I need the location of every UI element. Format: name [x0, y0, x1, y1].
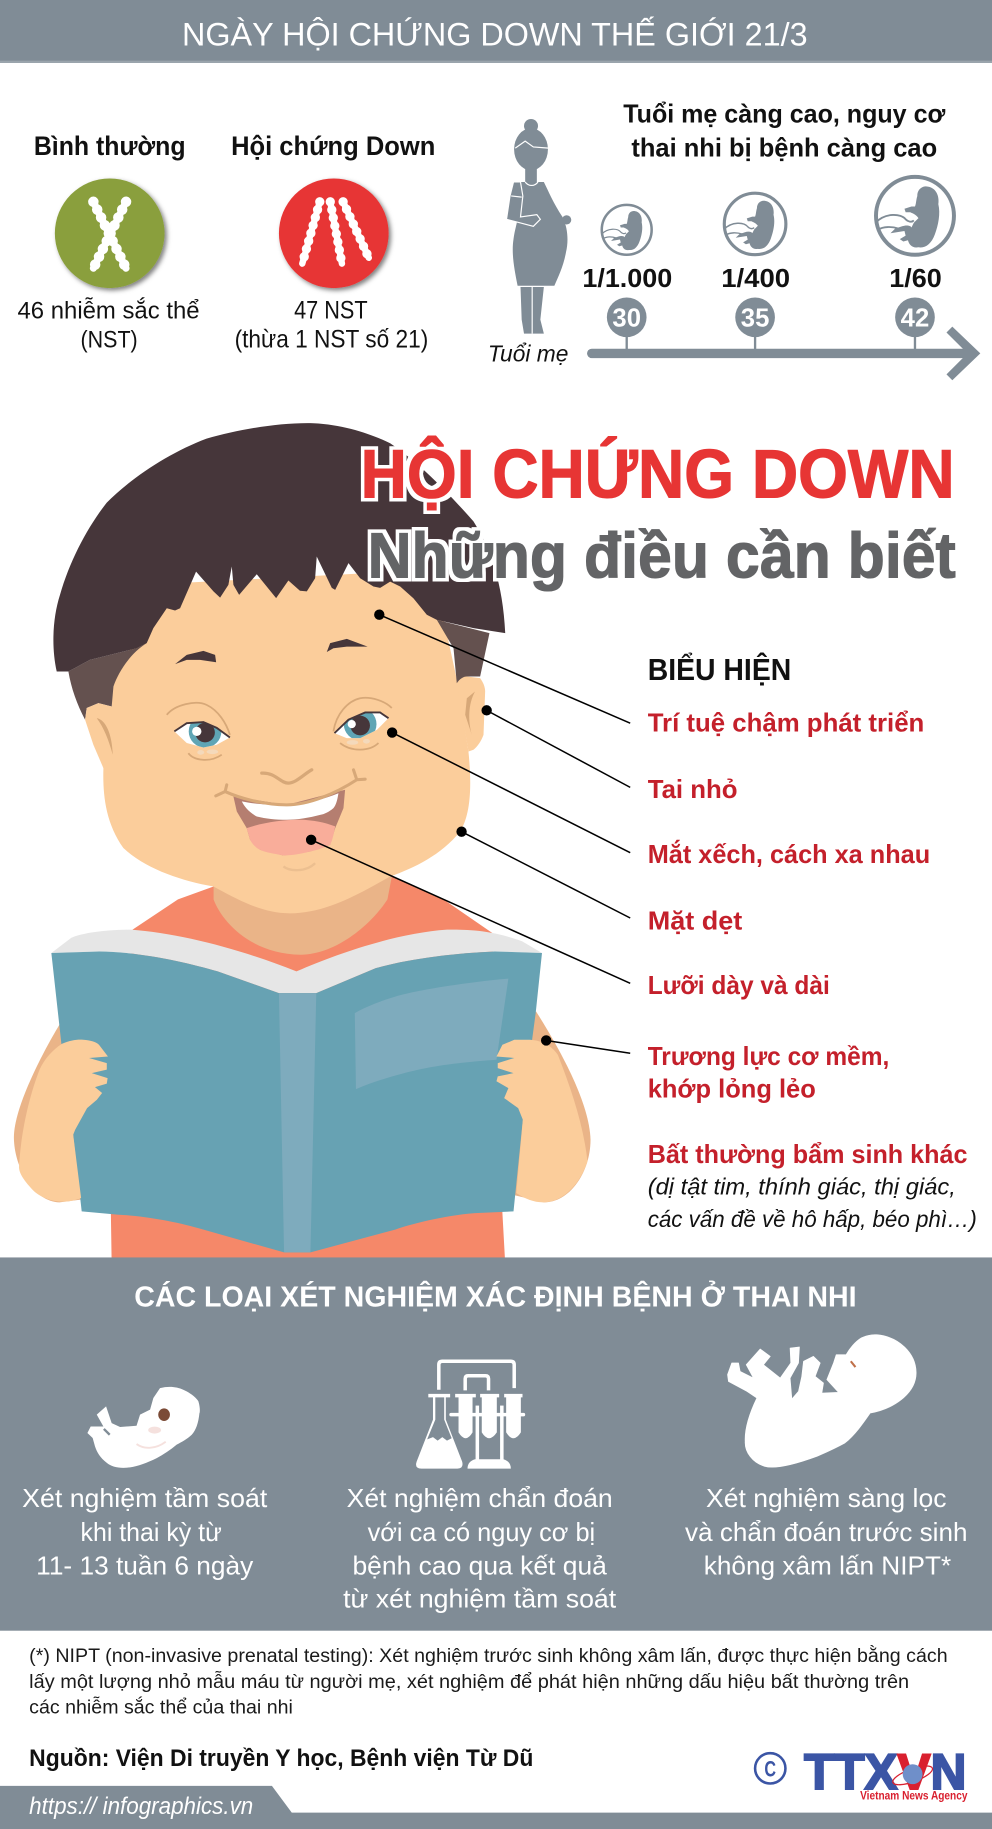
panel: normal chromosomes: (NST): [81, 327, 138, 354]
logo: copyright mark: C: [764, 1757, 776, 1782]
heading: age risk: thai nhi bị bệnh càng cao: [631, 132, 937, 162]
text: screening test: khi thai kỳ từ: [81, 1517, 222, 1547]
book pages: [51, 930, 542, 993]
header banner: NGÀY HỘI CHỨNG DOWN THẾ GIỚI 21/3: [182, 15, 808, 52]
book label: [355, 979, 508, 1089]
panel: symptoms list: Trương lực cơ mềm,: [648, 1043, 889, 1071]
footer bar: https:// infographics.vn: [29, 1793, 253, 1820]
boy left eye: [167, 703, 230, 760]
panel: Down syndrome chromosomes: Hội chứng Down: [231, 131, 435, 161]
main title: [361, 436, 956, 591]
text: NIPT test: [685, 1483, 967, 1581]
icon: fetus: [728, 1335, 916, 1467]
panel: symptoms list: BIỂU HIỆN: [648, 653, 791, 687]
panel: symptoms list: Mắt xếch, cách xa nhau: [648, 839, 930, 869]
tests heading: CÁC LOẠI XÉT NGHIỆM XÁC ĐỊNH BỆNH Ở THAI NHI: [134, 1279, 857, 1313]
boy right hand: [496, 1040, 587, 1202]
boy left hand: [19, 1040, 108, 1202]
footnote: lấy một lượng nhỏ mẫu máu từ người mẹ, xét nghiệm để phát hiện những dấu hiệu bất thường trên: [29, 1671, 909, 1693]
text: NIPT test: không xâm lấn NIPT*: [704, 1551, 951, 1581]
panel: normal chromosomes: [18, 131, 200, 354]
icon: fetus medium: [724, 193, 786, 255]
text: NIPT test: Xét nghiệm sàng lọc: [706, 1483, 946, 1513]
icon: lab flask and test tubes: [416, 1361, 525, 1469]
panel: Down syndrome chromosomes: 47 NST: [294, 296, 368, 324]
boy eyebrows: [175, 639, 368, 664]
boy mouth: [216, 770, 365, 870]
logo: copyright mark: [755, 1753, 785, 1784]
boy hair: [53, 423, 505, 672]
book cover: [51, 951, 542, 1252]
panel: symptoms list: [648, 653, 977, 1232]
boy nose: [262, 770, 312, 783]
pointer lines: [307, 610, 630, 1053]
illustration: boy reading book: [14, 423, 591, 1257]
panel: normal chromosomes: Bình thường: [34, 131, 186, 161]
text: diagnostic test: [343, 1483, 617, 1613]
footnote: [29, 1645, 948, 1719]
panel: symptoms list: khớp lỏng lẻo: [648, 1076, 816, 1104]
panel: normal chromosomes: 46 nhiễm sắc thể: [18, 297, 200, 324]
panel: symptoms list: (dị tật tim, thính giác, thị giác,: [648, 1173, 956, 1199]
panel: test types: [0, 1257, 992, 1631]
panel: Down syndrome chromosomes: (thừa 1 NST số 21): [235, 326, 428, 354]
panel: symptoms list: Lưỡi dày và dài: [648, 972, 830, 1000]
text: NIPT test: và chẩn đoán trước sinh: [685, 1517, 967, 1547]
icon: embryo: [87, 1387, 200, 1468]
icon: pregnant woman: [507, 119, 571, 334]
age timeline arrow: 30: [612, 305, 641, 333]
footer bar: [0, 1786, 992, 1829]
logo: TTXVN: TTXVN: [804, 1744, 966, 1800]
heading: age risk: [623, 98, 946, 162]
risk figures: 1/400: [721, 265, 790, 293]
main title: Những điều cần biết: [368, 519, 956, 591]
text: diagnostic test: Xét nghiệm chẩn đoán: [347, 1483, 613, 1513]
boy neck: [214, 875, 392, 955]
boy hair sides: [68, 620, 489, 720]
book spine: [279, 993, 316, 1252]
header banner: [0, 0, 992, 63]
boy face: [103, 572, 470, 913]
panel: symptoms list: Bất thường bẩm sinh khác: [648, 1141, 967, 1169]
icon: fetus large: [875, 177, 954, 255]
risk figures: 1/60: [889, 265, 942, 293]
footnote: (*) NIPT (non-invasive prenatal testing): Xét nghiệm trước sinh không xâm lấn, được thực hiện bằng cách: [29, 1645, 948, 1667]
text: screening test: [22, 1483, 268, 1581]
panel: symptoms list: Trí tuệ chậm phát triển: [648, 709, 924, 737]
boy right eye: [333, 698, 392, 750]
panel: Down syndrome chromosomes: [231, 131, 435, 354]
age timeline arrow: 35: [741, 305, 769, 333]
risk figures: 1/1.000: [582, 265, 672, 293]
text: screening test: 11- 13 tuần 6 ngày: [36, 1551, 254, 1581]
label: mother's age: Tuổi mẹ: [488, 341, 568, 367]
source: Nguồn: Viện Di truyền Y học, Bệnh viện Từ Dũ: [29, 1745, 533, 1772]
main title: HỘI CHỨNG DOWN: [361, 436, 955, 512]
panel: symptoms list: các vấn đề về hô hấp, béo phì…): [648, 1206, 977, 1232]
age timeline arrow: 42: [901, 305, 929, 333]
text: diagnostic test: bệnh cao qua kết quả: [352, 1551, 607, 1581]
age timeline arrow: [587, 297, 980, 380]
panel: symptoms list: Tai nhỏ: [648, 776, 738, 804]
icon: fetus small: [601, 205, 652, 255]
boy ears: [85, 677, 485, 770]
text: screening test: Xét nghiệm tầm soát: [22, 1483, 268, 1513]
panel: symptoms list: Mặt dẹt: [648, 908, 743, 936]
logo: TTXVN: Vietnam News Agency: [860, 1788, 968, 1802]
text: diagnostic test: với ca có nguy cơ bị: [368, 1517, 595, 1547]
text: diagnostic test: từ xét nghiệm tầm soát: [343, 1583, 617, 1613]
boy shirt: [111, 876, 505, 1257]
boy arms: [14, 1011, 591, 1202]
heading: age risk: Tuổi mẹ càng cao, nguy cơ: [623, 98, 946, 128]
footnote: các nhiễm sắc thể của thai nhi: [29, 1697, 293, 1719]
risk figures: [582, 265, 942, 293]
